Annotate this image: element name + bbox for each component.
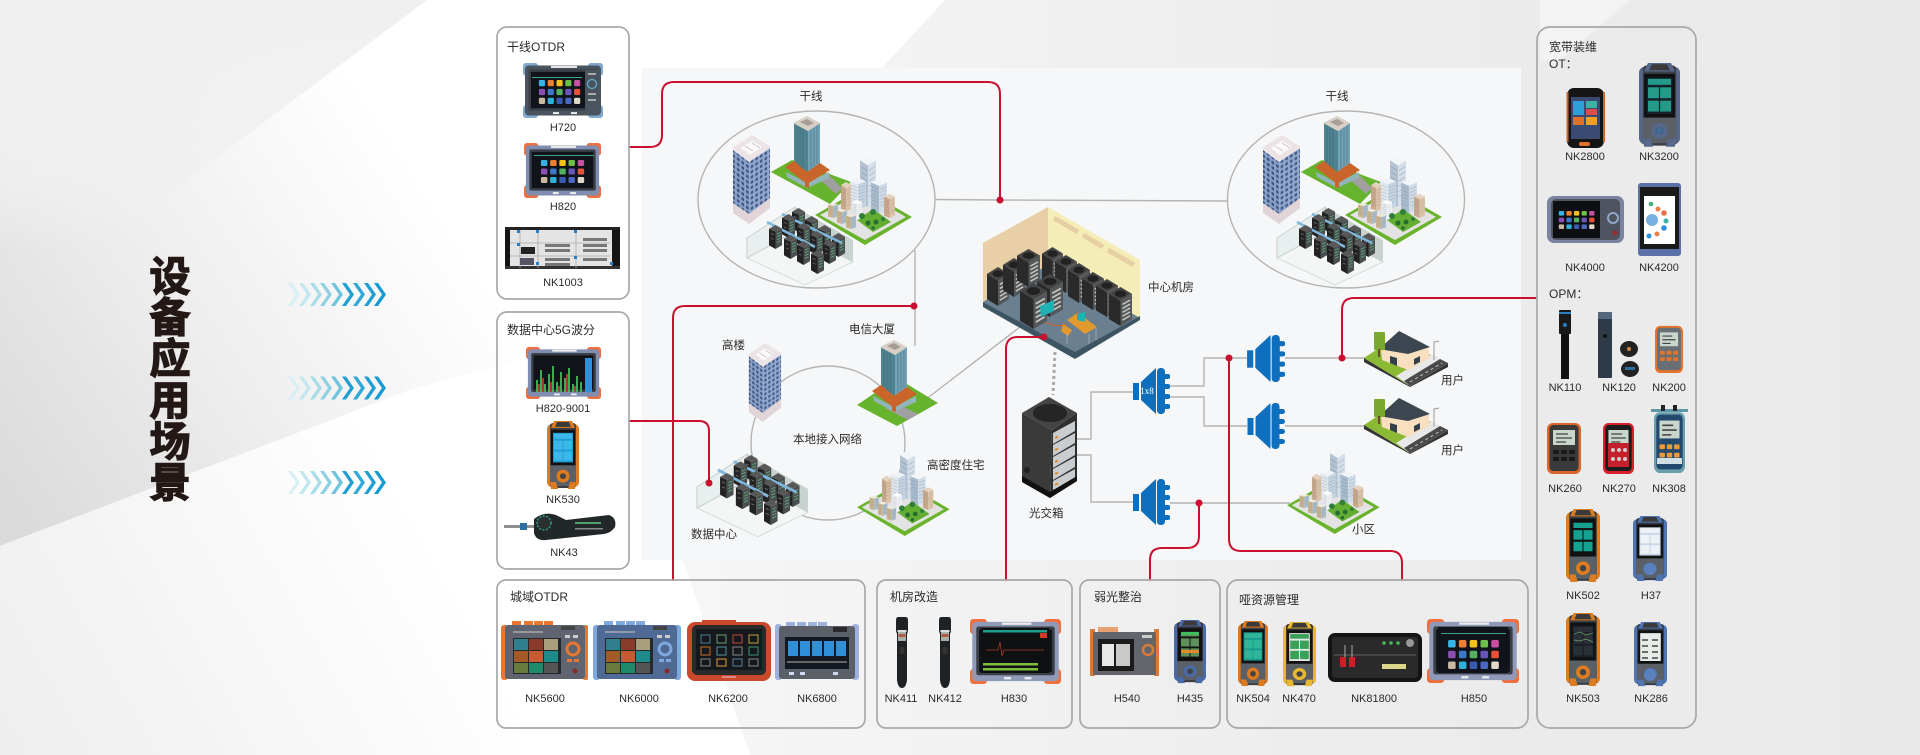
heading: 机房改造: [890, 589, 938, 604]
heading: 弱光整治: [1094, 589, 1142, 604]
sub-heading: OT: OT：: [1549, 57, 1578, 71]
device: NK110: NK110: [1549, 382, 1581, 394]
splitter 1x8: [1133, 368, 1170, 414]
panel: 弱光整治: [1080, 580, 1220, 728]
device: H435: [1174, 620, 1206, 705]
device: H820-9001: [526, 347, 601, 415]
label: 干线 left: 干线: [800, 89, 823, 103]
device: NK260: NK260: [1548, 483, 1582, 495]
device: NK1003: [505, 227, 620, 289]
home user 1: 用户: [1441, 373, 1464, 387]
community: 小区: 小区: [1352, 523, 1375, 536]
device: NK2800: [1565, 88, 1605, 163]
device: H720: [523, 63, 603, 134]
device: H720: H720: [550, 122, 576, 134]
panel: 城域OTDR: [497, 580, 865, 728]
device: H37: [1633, 516, 1667, 602]
device: NK200: [1652, 326, 1686, 394]
main title: 设备应用场景: 设: [150, 254, 190, 300]
device: NK530: NK530: [546, 494, 580, 506]
local access network ring: [691, 322, 984, 541]
device: NK286: [1634, 622, 1668, 705]
panel: 宽带装维: [1537, 27, 1696, 728]
device: NK502: NK502: [1566, 590, 1600, 602]
device: NK5600: [501, 621, 589, 705]
device: H830: H830: [1001, 693, 1027, 705]
label: 电信大厦: 电信大厦: [849, 322, 895, 336]
device: NK4200: NK4200: [1639, 262, 1679, 274]
device: NK3200: [1639, 63, 1680, 163]
device: NK110: [1549, 310, 1581, 394]
device: NK1003: NK1003: [543, 277, 583, 289]
label: 光交箱: 光交箱: [1029, 506, 1064, 520]
device: NK470: [1282, 622, 1316, 705]
label: 高楼: 高楼: [722, 338, 745, 352]
main title: 设备应用场景: 场: [150, 419, 190, 465]
device: H435: H435: [1177, 693, 1203, 705]
device: NK270: [1602, 423, 1636, 495]
main title: 设备应用场景: 应: [150, 336, 190, 382]
device: NK5600: NK5600: [525, 693, 565, 705]
main title: 设备应用场景: 备: [150, 295, 190, 341]
label: 数据中心: 数据中心: [691, 527, 737, 541]
label: 中心机房: 中心机房: [1148, 280, 1194, 294]
device: NK260: [1547, 423, 1582, 495]
building: 电信大厦: [857, 340, 938, 426]
device: NK81800: NK81800: [1351, 693, 1397, 705]
community: 小区: [1287, 448, 1380, 536]
device: NK6800: [775, 622, 859, 705]
device: NK200: NK200: [1652, 382, 1686, 394]
device: NK411: NK411: [885, 693, 917, 705]
device: NK2800: NK2800: [1565, 151, 1605, 163]
device: NK504: NK504: [1236, 693, 1270, 705]
device: NK504: [1236, 621, 1270, 705]
splitter middle right: [1248, 403, 1285, 449]
device: NK286: NK286: [1634, 693, 1668, 705]
red test connection lines: [629, 82, 1537, 581]
panel: 数据中心5G波分: [497, 312, 629, 569]
device: NK6000: [588, 617, 690, 705]
device: NK4000: [1547, 196, 1624, 274]
device: H540: [1090, 627, 1159, 705]
device: H37: H37: [1641, 590, 1661, 602]
home user 2: 用户: [1441, 443, 1464, 457]
device: NK43: [504, 514, 615, 559]
device: NK6200: [687, 620, 771, 705]
building: 数据中心: [697, 454, 808, 537]
device: NK43: NK43: [550, 547, 578, 559]
splitter lower: [1133, 479, 1170, 525]
device: NK6000: NK6000: [619, 693, 659, 705]
device: NK4200: [1638, 183, 1681, 274]
heading: 哑资源管理: [1239, 592, 1299, 607]
label: 干线 right: 干线: [1326, 89, 1349, 103]
optical cross box: 光交箱: [1022, 397, 1077, 520]
device: NK308: [1651, 405, 1688, 495]
heading: 干线OTDR: [507, 40, 565, 54]
panel: 哑资源管理: [1227, 580, 1528, 728]
main title: 设备应用场景: 景: [150, 460, 190, 506]
device: NK3200: NK3200: [1639, 151, 1679, 163]
building: 高密度住宅: [857, 450, 950, 536]
device: H850: H850: [1461, 693, 1487, 705]
network diagram background panel: [642, 68, 1521, 560]
device: NK412: NK412: [928, 693, 962, 705]
device: NK270: NK270: [1602, 483, 1636, 495]
arrows: middle chevrons: [288, 376, 386, 400]
panel: 干线OTDR: [497, 27, 629, 299]
device: H540: H540: [1114, 693, 1140, 705]
device: NK470: NK470: [1282, 693, 1316, 705]
device: NK502: [1566, 509, 1600, 602]
heading: 宽带装维: [1549, 39, 1597, 54]
trunk ring left: 干线: [698, 89, 935, 288]
device: H820: [524, 143, 601, 213]
device: H820-9001: H820-9001: [536, 403, 590, 415]
device: H850: [1427, 619, 1519, 705]
heading: 城域OTDR: [510, 590, 568, 604]
arrows: bottom chevrons: [288, 471, 386, 494]
device: NK4000: NK4000: [1565, 262, 1605, 274]
splitter upper right: [1247, 335, 1285, 382]
label: 本地接入网络: 本地接入网络: [793, 432, 862, 446]
panel: 机房改造: [877, 580, 1072, 728]
device: NK530: [546, 421, 580, 506]
device: NK120: NK120: [1602, 382, 1636, 394]
label: 高密度住宅: 高密度住宅: [927, 458, 984, 472]
device: NK412: [928, 617, 962, 705]
device: NK503: NK503: [1566, 693, 1600, 705]
splitters: [1133, 335, 1285, 525]
central machine room: [983, 207, 1194, 359]
device: NK503: [1566, 613, 1600, 705]
home user 1: [1364, 331, 1464, 387]
network connection lines: [915, 200, 1366, 503]
device: H820: H820: [550, 201, 576, 213]
arrows: top chevrons: [288, 283, 386, 306]
sub-heading: OPM: OPM：: [1549, 287, 1588, 301]
splitter 1x8: 1x8: [1140, 386, 1154, 396]
device: NK411: [885, 617, 917, 705]
device: H830: [970, 619, 1061, 705]
building: 高楼: [748, 343, 782, 422]
device: NK120: [1598, 312, 1639, 394]
device: NK6200: NK6200: [708, 693, 748, 705]
device: NK81800: [1328, 633, 1422, 705]
device: NK6800: NK6800: [797, 693, 837, 705]
trunk ring right: 干线: [1228, 89, 1464, 288]
home user 2: [1364, 398, 1464, 457]
heading: 数据中心5G波分: [507, 322, 595, 337]
main title: 设备应用场景: 用: [150, 378, 190, 424]
device: NK308: NK308: [1652, 483, 1686, 495]
